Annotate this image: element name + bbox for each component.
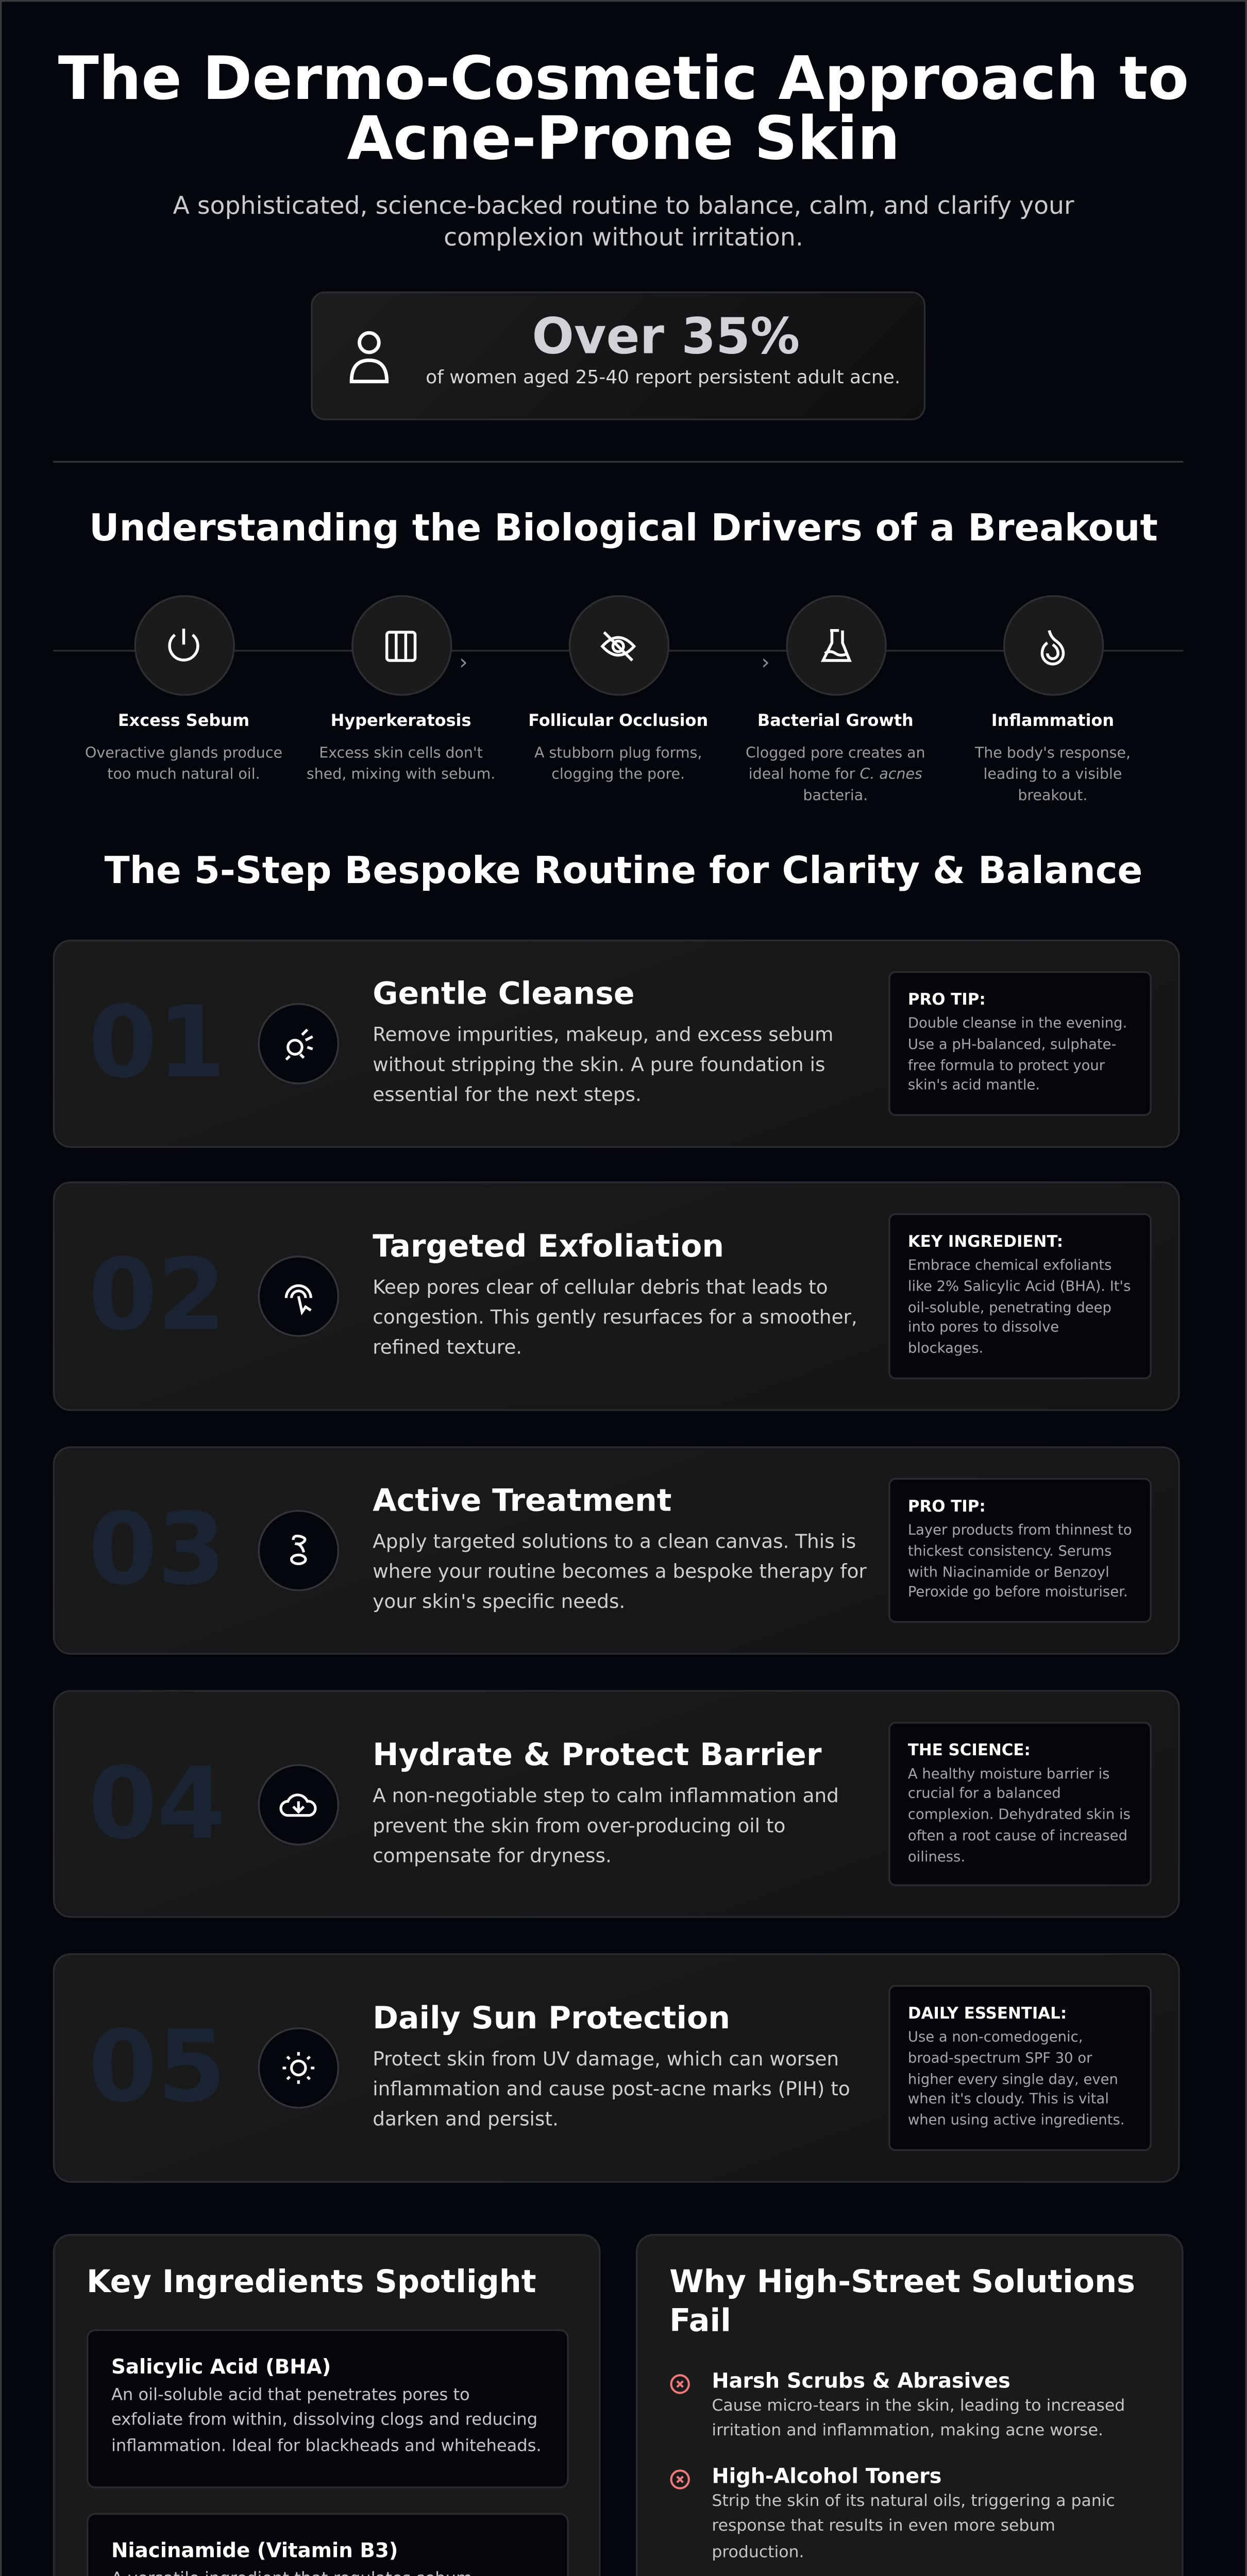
ingredient: salicylic acid: An oil-soluble acid that penetrates pores to exfoliate from within, dissolving clogs and reducing inflammation. Ideal for blackheads and whiteheads.: [111, 2386, 542, 2456]
title: [58, 44, 1189, 173]
step card 04: A non-negotiable step to calm inflammation and prevent the skin from over-producing oil to compensate for dryness.: [373, 1784, 839, 1867]
step card 02: Targeted Exfoliation: [373, 1230, 724, 1265]
step card 02: [53, 1181, 1180, 1411]
tip box: KEY INGREDIENT:: [908, 1234, 1063, 1252]
subtitle: A sophisticated, science-backed routine to balance, calm, and clarify your complexion without irritation.: [173, 193, 1074, 252]
ingredient: salicylic acid: Salicylic Acid (BHA): [111, 2356, 331, 2379]
driver: excess sebum: Excess Sebum: [118, 711, 249, 731]
heading: biological drivers: Understanding the Biological Drivers of a Breakout: [89, 507, 1158, 549]
panel: key ingredients: Key Ingredients Spotlight: [87, 2266, 536, 2301]
driver: bacterial growth: Clogged pore creates an ideal home for C. acnes bacteria.: [746, 743, 925, 804]
icon: person: [349, 331, 389, 383]
step card 01: 01: [88, 986, 226, 1101]
arrow: ›: [761, 650, 770, 674]
arrow: ›: [459, 650, 468, 674]
title: Acne-Prone Skin: [347, 104, 900, 173]
icon: sun: [258, 2027, 339, 2109]
driver: follicular occlusion: Follicular Occlusion: [528, 711, 708, 731]
ingredient: niacinamide: [87, 2513, 569, 2576]
fail item 1: [670, 2368, 1125, 2441]
driver: inflammation: The body's response, leading to a visible breakout.: [975, 743, 1131, 804]
step card 03: Active Treatment: [373, 1484, 672, 1520]
icon: exfoliation: [258, 1256, 339, 1337]
driver: inflammation: [975, 595, 1131, 804]
step card 05: 05: [88, 2011, 226, 2125]
tip box: [888, 1478, 1152, 1623]
panel: high-street fail: [636, 2234, 1184, 2576]
step card 01: Gentle Cleanse: [373, 977, 635, 1013]
step card 01: [53, 940, 1180, 1148]
driver: follicular occlusion: A stubborn plug forms, clogging the pore.: [534, 743, 702, 782]
ingredient: salicylic acid: [87, 2329, 569, 2488]
step card 05: [53, 1953, 1180, 2183]
tip box: THE SCIENCE:: [908, 1742, 1031, 1760]
fail item 1: Harsh Scrubs & Abrasives: [712, 2368, 1010, 2393]
step card 04: 04: [88, 1747, 226, 1861]
tip box: Double cleanse in the evening. Use a pH-balanced, sulphate-free formula to protect your skin's acid mantle.: [908, 1015, 1127, 1094]
step card 02: Keep pores clear of cellular debris that leads to congestion. This gently resurfaces for a smoother, refined texture.: [373, 1276, 857, 1359]
driver: bacterial growth: [746, 595, 925, 804]
step card 01: Remove impurities, makeup, and excess sebum without stripping the skin. A pure foundation is essential for the next steps.: [373, 1023, 833, 1106]
fail item 2: [670, 2464, 1115, 2562]
driver: excess sebum: [85, 595, 282, 782]
ingredient: niacinamide: Niacinamide (Vitamin B3): [111, 2539, 398, 2563]
fail item 2: High-Alcohol Toners: [712, 2464, 941, 2488]
tip box: [888, 1721, 1152, 1887]
tip box: [888, 1213, 1152, 1379]
panel: high-street fail: Why High-Street Solutions Fail: [669, 2266, 1135, 2340]
driver: hyperkeratosis: Hyperkeratosis: [331, 711, 471, 731]
panel: key ingredients: [53, 2234, 600, 2576]
driver: follicular occlusion: [528, 595, 708, 782]
step card 02: 02: [88, 1239, 226, 1353]
tip box: PRO TIP:: [908, 1499, 986, 1517]
step card 05: Protect skin from UV damage, which can worsen inflammation and cause post-acne marks (PIH) to darken and persist.: [373, 2047, 850, 2131]
step card 04: [53, 1690, 1180, 1918]
fail item 1: Cause micro-tears in the skin, leading to increased irritation and inflammation, making acne worse.: [712, 2396, 1125, 2441]
tip box: Use a non-comedogenic, broad-spectrum SPF 30 or higher every single day, even when it's cloudy. This is vital when using active ingredients.: [908, 2029, 1125, 2128]
title: The Dermo-Cosmetic Approach to: [58, 44, 1189, 113]
icon: cloud: [258, 1764, 339, 1844]
tip box: [888, 971, 1152, 1116]
tip box: DAILY ESSENTIAL:: [908, 2006, 1067, 2024]
step card 04: Hydrate & Protect Barrier: [373, 1738, 821, 1773]
step card 05: Daily Sun Protection: [373, 2002, 730, 2037]
driver: hyperkeratosis: [307, 595, 495, 782]
step card 03: Apply targeted solutions to a clean canvas. This is where your routine becomes a bespoke therapy for your skin's specific needs.: [373, 1530, 867, 1613]
stat text: of women aged 25-40 report persistent adult acne.: [426, 367, 900, 388]
tip box: PRO TIP:: [908, 992, 986, 1010]
driver: inflammation: Inflammation: [991, 711, 1114, 731]
heading: 5-step routine: The 5-Step Bespoke Routine for Clarity & Balance: [105, 850, 1142, 892]
tip box: A healthy moisture barrier is crucial for a balanced complexion. Dehydrated skin is often a root cause of increased oiliness.: [908, 1765, 1131, 1865]
tip box: [888, 1985, 1152, 2151]
tip box: Layer products from thinnest to thickest consistency. Serums with Niacinamide or Benzoyl Peroxide go before moisturiser.: [908, 1522, 1132, 1601]
driver: excess sebum: Overactive glands produce too much natural oil.: [85, 743, 282, 782]
step card 03: 03: [88, 1493, 226, 1608]
driver: hyperkeratosis: Excess skin cells don't shed, mixing with sebum.: [307, 743, 495, 782]
fail item 2: Strip the skin of its natural oils, triggering a panic response that results in even more sebum production.: [712, 2492, 1115, 2562]
icon: treatment: [258, 1510, 339, 1591]
icon: cleanse: [258, 1003, 339, 1084]
stat number: Over 35%: [532, 307, 800, 366]
driver: bacterial growth: Bacterial Growth: [757, 711, 914, 731]
tip box: Embrace chemical exfoliants like 2% Salicylic Acid (BHA). It's oil-soluble, penetrating deep into pores to dissolve blockages.: [908, 1258, 1131, 1357]
step card 03: [53, 1446, 1180, 1655]
stat callout: [311, 292, 925, 420]
